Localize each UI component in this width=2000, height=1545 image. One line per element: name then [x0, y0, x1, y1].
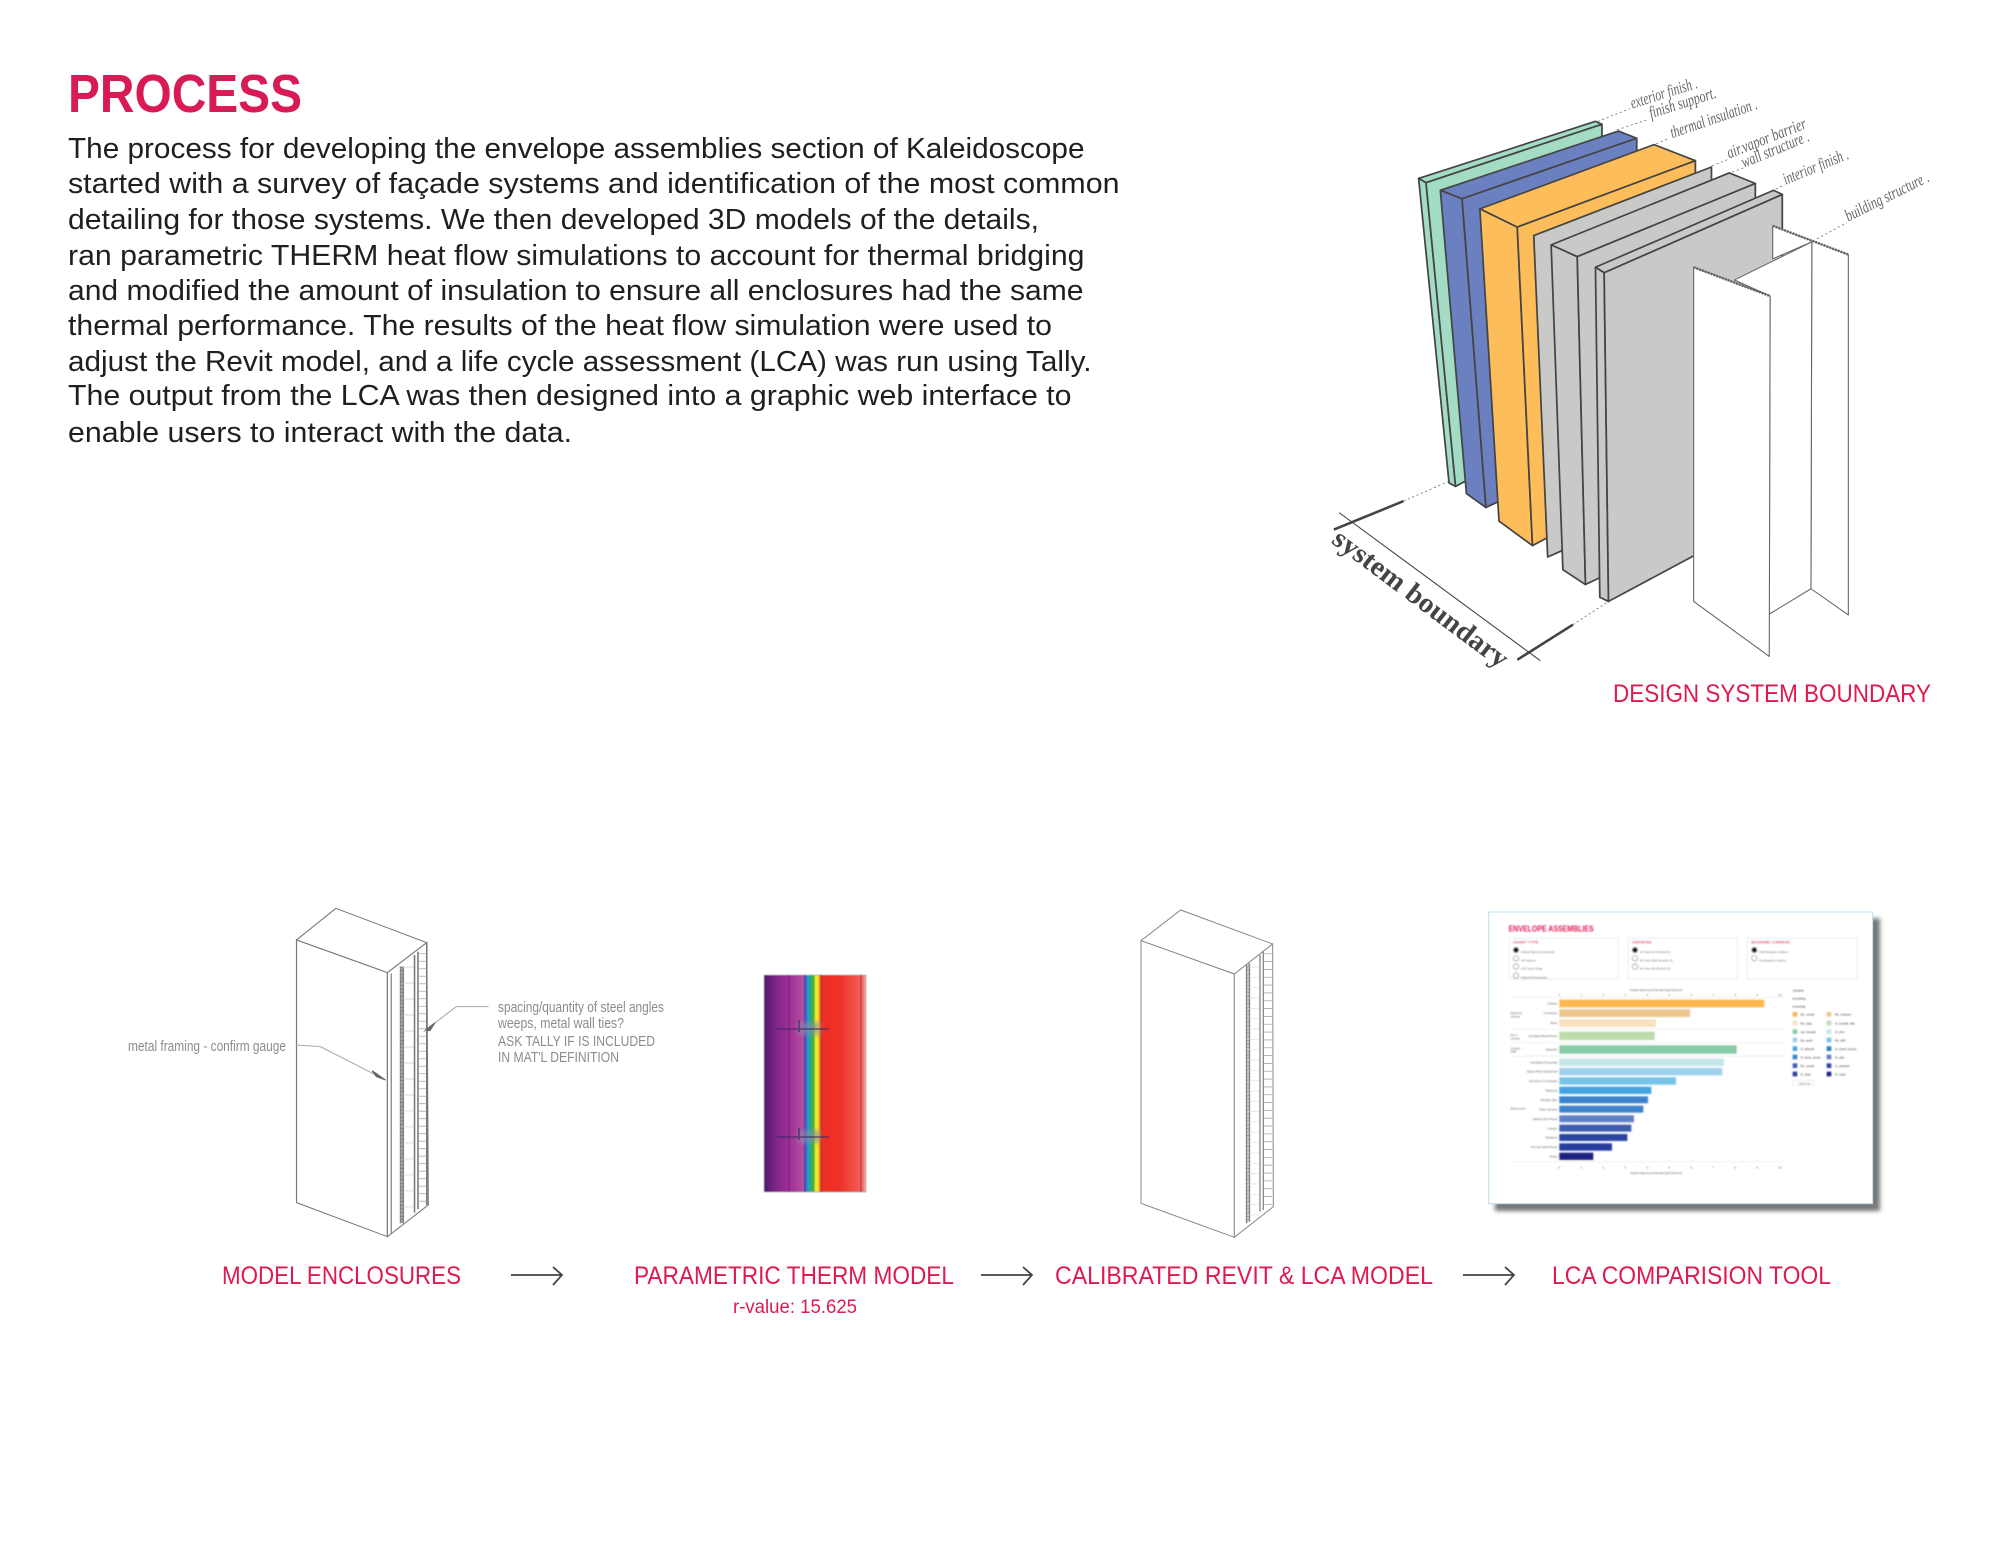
bar labels: Granite	[1548, 1001, 1558, 1005]
body text block: ran parametric THERM heat flow simulations to account for thermal bridging	[68, 240, 1084, 272]
bar labels: Stainless	[1545, 1136, 1558, 1140]
r-value note: r-value: 15.625	[733, 1297, 857, 1318]
legend labels: G_clip	[1835, 1055, 1844, 1059]
option panels	[1509, 938, 1857, 979]
category labels: Veneer	[1511, 1014, 1520, 1018]
arrow 2	[981, 1267, 1032, 1285]
bar labels: Copper	[1548, 1126, 1557, 1130]
panel headings: BIOGENIC CARBON	[1751, 940, 1790, 945]
axis numbers: 5	[1668, 1166, 1670, 1170]
bar labels: Aluminum Composite	[1529, 1079, 1558, 1083]
leader arrowheads	[372, 1023, 435, 1080]
body text block: The process for developing the envelope assemblies section of Kaleidoscope	[68, 133, 1084, 165]
panel headings: LIFESPAN	[1632, 940, 1652, 945]
step label: calibrated revit and lca model: CALIBRATED REVIT & LCA MODEL	[1055, 1262, 1433, 1290]
axis numbers: 2	[1602, 993, 1604, 997]
legend heading: bronzing	[1793, 1004, 1805, 1008]
anchors	[777, 1020, 829, 1140]
legend reset button: select all	[1799, 1081, 1811, 1085]
chart axis titles: Global Warming Potential (kgCO2e/m2)	[1630, 988, 1682, 992]
legend labels	[1801, 1013, 1856, 1076]
layer: exterior finish	[1419, 121, 1602, 486]
option labels: 30 Year (No Module D)	[1640, 950, 1670, 954]
axis numbers: 0	[1558, 1166, 1560, 1170]
bar labels: Limestone	[1544, 1011, 1558, 1015]
option labels	[1521, 950, 1789, 979]
axis numbers: 9	[1756, 993, 1758, 997]
body text block: adjust the Revit model, and a life cycle assessment (LCA) was run using Tally.	[68, 346, 1092, 378]
annotation: steel angles: IN MAT'L DEFINITION	[498, 1050, 619, 1066]
title: PROCESS	[68, 64, 302, 124]
bar labels: Wood	[1550, 1154, 1558, 1158]
legend labels: Rs_arch	[1801, 1038, 1813, 1042]
legend labels: G_alucob	[1801, 1047, 1814, 1051]
legend heading	[1793, 989, 1806, 1008]
bar labels: Formed Steel Panel	[1531, 1145, 1558, 1149]
card	[1489, 912, 1873, 1204]
bar labels: Glass Fiber Reinforced	[1527, 1070, 1558, 1074]
bar labels: Insulated Metal Panel	[1529, 1034, 1558, 1038]
legend labels: Rs_diff	[1835, 1038, 1845, 1042]
bar labels: Brick	[1551, 1021, 1558, 1025]
card heading: ENVELOPE ASSEMBLIES	[1509, 925, 1594, 934]
boundary dimension lines	[1334, 109, 1847, 661]
legend labels: G_stud	[1835, 1072, 1845, 1076]
category labels	[1511, 1011, 1526, 1110]
category labels: Rainscreen	[1511, 1106, 1526, 1110]
axis numbers: 3	[1624, 993, 1626, 997]
layer: finish support	[1440, 131, 1637, 508]
legend labels: Rs_clay	[1801, 1021, 1812, 1025]
category labels: Veneer	[1511, 1036, 1520, 1040]
card shadow	[1495, 918, 1880, 1211]
layer labels: building structure .	[1841, 168, 1932, 225]
chart axis titles: Global Warming Potential (kgCO2e/m2)	[1630, 1171, 1682, 1175]
layer: interior finish	[1595, 190, 1782, 601]
horizontal bar chart	[1559, 1000, 1764, 1160]
layer: air vapor barrier	[1534, 167, 1711, 557]
legend labels: G_sheet_wood	[1835, 1047, 1856, 1051]
building structure: steel beam	[1694, 226, 1848, 656]
axis numbers: 6	[1690, 993, 1692, 997]
axis numbers: 9	[1756, 1166, 1758, 1170]
bar labels: Ventilated Terracotta	[1530, 1060, 1558, 1064]
category labels: Wall	[1511, 1050, 1517, 1054]
arrow 3	[1463, 1267, 1514, 1285]
bar labels: Fiber Cement	[1539, 1107, 1557, 1111]
body text block: and modified the amount of insulation to ensure all enclosures had the same	[68, 275, 1084, 307]
legend labels: G_clad	[1801, 1072, 1811, 1076]
legend heading: ceramic	[1793, 989, 1804, 993]
annotation: steel angles: ASK TALLY IF IS INCLUDED	[498, 1034, 655, 1050]
THERM heat flow image	[764, 975, 866, 1192]
axis numbers	[1558, 993, 1782, 1170]
layer labels: air.vapor barrier	[1724, 114, 1809, 162]
layer labels: wall structure .	[1738, 127, 1812, 171]
annotation: metal framing: metal framing - confirm gauge	[128, 1039, 286, 1055]
body text block: enable users to interact with the data.	[68, 417, 572, 449]
legend swatches	[1793, 1012, 1831, 1076]
step label: model enclosures: MODEL ENCLOSURES	[222, 1262, 461, 1290]
layer: wall structure	[1551, 173, 1755, 585]
layer labels: finish support.	[1646, 83, 1718, 122]
legend reset button	[1793, 1080, 1814, 1085]
legend labels: G_cfrc	[1835, 1030, 1845, 1034]
axis numbers: 4	[1646, 1166, 1648, 1170]
option labels: Global Warming Potential	[1521, 950, 1555, 954]
layer labels: interior finish .	[1780, 145, 1851, 188]
body text block: thermal performance. The results of the heat flow simulation were used to	[68, 310, 1052, 342]
axis numbers: 1	[1580, 993, 1582, 997]
body text block: started with a survey of façade systems and identification of the most common	[68, 168, 1120, 200]
body text block: The output from the LCA was then designed into a graphic web interface to	[68, 380, 1072, 412]
axis numbers: 3	[1624, 1166, 1626, 1170]
caption: design system boundary: DESIGN SYSTEM BOUNDARY	[1613, 680, 1931, 708]
category labels: Pre-c	[1511, 1033, 1518, 1037]
legend labels: G_cleated	[1835, 1064, 1849, 1068]
radio buttons	[1513, 947, 1757, 978]
axis numbers: 1	[1580, 1166, 1582, 1170]
option labels: All Impacts	[1521, 958, 1536, 962]
diagram: design system boundary layers	[1326, 74, 1932, 674]
option labels: Life Cycle Stage	[1521, 967, 1543, 971]
axis numbers: 2	[1602, 1166, 1604, 1170]
leader lines	[296, 1007, 489, 1080]
option labels: No Biogenic Carbon	[1759, 958, 1786, 962]
option labels: 60 Year (With Module D)	[1640, 958, 1673, 962]
axis numbers: 7	[1712, 1166, 1714, 1170]
LCA comparison tool screenshot	[1489, 912, 1880, 1211]
axis numbers: 10	[1778, 1166, 1782, 1170]
legend labels: cw_facade	[1801, 1030, 1816, 1034]
body text block: detailing for those systems. We then developed 3D models of the details,	[68, 204, 1039, 236]
axis numbers: 5	[1668, 993, 1670, 997]
bar labels: Natural Zinc Panel	[1533, 1117, 1558, 1121]
axis numbers: 8	[1734, 1166, 1736, 1170]
category labels: Curtain	[1511, 1046, 1521, 1050]
axis numbers: 0	[1558, 993, 1560, 997]
step label: lca comparison tool: LCA COMPARISION TOOL	[1552, 1262, 1831, 1290]
panel headings: CHART TYPE	[1513, 940, 1539, 945]
legend labels: Rs_cement	[1835, 1013, 1851, 1017]
panel headings	[1513, 940, 1790, 945]
bar labels	[1527, 1001, 1558, 1158]
category labels: Masonry	[1511, 1011, 1523, 1015]
option labels: 60 Year (No Module D)	[1640, 967, 1670, 971]
axis numbers: 7	[1712, 993, 1714, 997]
option labels: With Biogenic Carbon	[1759, 950, 1789, 954]
chart axis titles	[1630, 988, 1682, 1175]
model enclosure drawing	[296, 908, 489, 1237]
step label: parametric therm model: PARAMETRIC THERM MODEL	[634, 1262, 954, 1290]
chart group dividers	[1511, 997, 1785, 1162]
layer labels: exterior finish .	[1628, 74, 1700, 112]
legend labels: Rs_south	[1801, 1013, 1814, 1017]
layer: thermal insulation	[1480, 145, 1695, 546]
axis numbers: 4	[1646, 993, 1648, 997]
axis numbers: 10	[1778, 993, 1782, 997]
enclosure box	[296, 908, 428, 1237]
arrow 1	[511, 1267, 562, 1285]
annotation: steel angles: spacing/quantity of steel angles	[498, 1000, 664, 1016]
annotation: steel angles: weeps, metal wall ties?	[497, 1016, 624, 1032]
bar labels: Masonry	[1546, 1088, 1558, 1092]
legend labels: G_tone_wood	[1801, 1055, 1821, 1059]
axis numbers: 8	[1734, 993, 1736, 997]
layer labels	[1628, 74, 1932, 225]
bar labels: Metallic Skin	[1541, 1098, 1558, 1102]
anchor halos	[798, 1022, 820, 1143]
body text block	[68, 133, 1120, 449]
legend heading: brushing	[1793, 996, 1806, 1000]
option labels: Material Breakdown	[1521, 975, 1548, 979]
legend labels: G_insulat_flat	[1835, 1021, 1855, 1025]
bar labels: Spandrel	[1545, 1048, 1558, 1052]
axis numbers: 6	[1690, 1166, 1692, 1170]
calibrated Revit enclosure drawing	[1141, 910, 1273, 1237]
label: system boundary: system boundary	[1326, 523, 1515, 674]
legend labels: Rs_south	[1801, 1064, 1814, 1068]
layer labels: thermal insulation .	[1667, 95, 1760, 142]
annotation: steel angles	[497, 1000, 664, 1066]
